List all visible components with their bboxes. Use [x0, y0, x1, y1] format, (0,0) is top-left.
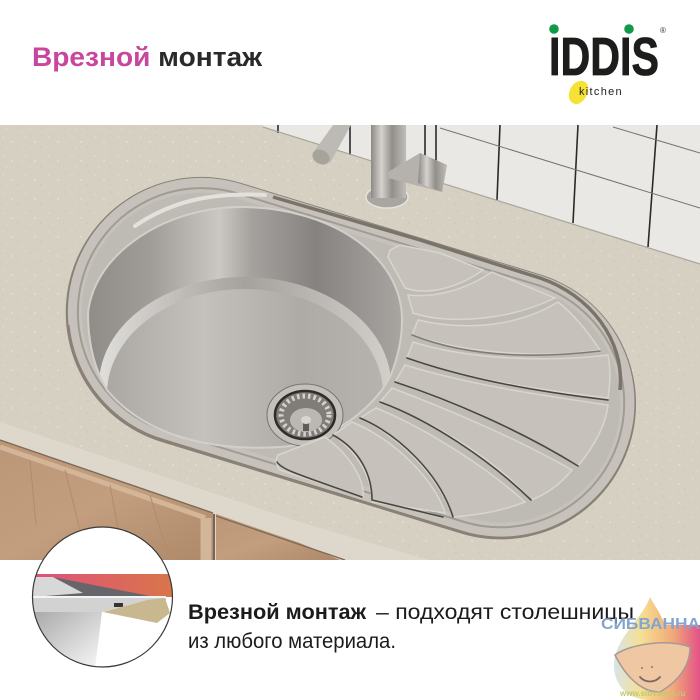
- bowl floor ridge: [100, 277, 390, 388]
- inset border: [32, 527, 172, 667]
- sink outer rim: [66, 176, 636, 540]
- countertop: [0, 125, 700, 560]
- sink groove: [76, 187, 626, 528]
- drainboard: [276, 245, 610, 517]
- inset sink highlight: [33, 577, 83, 597]
- caption line 1 regular: – подходят столешницы: [376, 601, 634, 624]
- faucet base: [366, 186, 408, 208]
- watermark url: www.sibvanna.ru: [619, 689, 686, 698]
- logo wordmark: IDDIS: [549, 27, 659, 87]
- inset bowl wall: [33, 612, 102, 668]
- watermark tub: [615, 643, 690, 692]
- rim dark band: [273, 197, 620, 390]
- watermark tub face: [640, 667, 660, 682]
- drain basket: [275, 391, 335, 439]
- drain flange: [267, 384, 343, 446]
- faucet handle: [313, 125, 351, 163]
- sink deck: [52, 163, 650, 552]
- drainboard grooves: [277, 335, 608, 517]
- drain plug: [290, 408, 322, 432]
- faucet body: [371, 125, 406, 198]
- caption line 1 bold: Врезной монтаж: [188, 601, 367, 624]
- counter front edge: [17, 431, 388, 554]
- caption line 2: из любого материала.: [188, 630, 396, 653]
- white caption band: [0, 560, 700, 700]
- inset chipboard: [103, 598, 170, 623]
- inset countertop surface: [33, 574, 172, 597]
- tile wall: [263, 125, 700, 264]
- inset: cross-section detail: [32, 527, 172, 668]
- faucet: [310, 125, 447, 208]
- logo yellow spot: [569, 81, 588, 104]
- bowl outline: [88, 207, 402, 448]
- drainboard panels: [388, 245, 483, 291]
- sink rim: [68, 178, 634, 537]
- logo green dots: [549, 24, 634, 34]
- bowl floor: [107, 289, 382, 446]
- bowl: [89, 208, 401, 446]
- watermark drop: [610, 595, 700, 700]
- cabinet fronts: [0, 440, 345, 560]
- bowl wall: [89, 208, 401, 374]
- watermark: Сибванна: [601, 595, 700, 700]
- rim highlight: [135, 194, 265, 226]
- logo kitchen: kitchen: [579, 86, 623, 98]
- sink body: [66, 176, 636, 540]
- rim lower band: [68, 325, 352, 499]
- inset background: [32, 527, 172, 667]
- photo: kitchen sink: [0, 125, 700, 560]
- logo: IDDIS kitchen: [549, 24, 666, 104]
- heading: Врезной монтаж: Врезной монтаж: [32, 42, 263, 72]
- inset sink top: [46, 577, 150, 596]
- inset sink edge: [33, 597, 166, 612]
- watermark wordmark: СИБВАННА: [601, 616, 700, 633]
- registered mark: ®: [660, 26, 666, 35]
- drain: [267, 384, 343, 446]
- faucet spout: [388, 153, 447, 192]
- caption text: [188, 601, 634, 653]
